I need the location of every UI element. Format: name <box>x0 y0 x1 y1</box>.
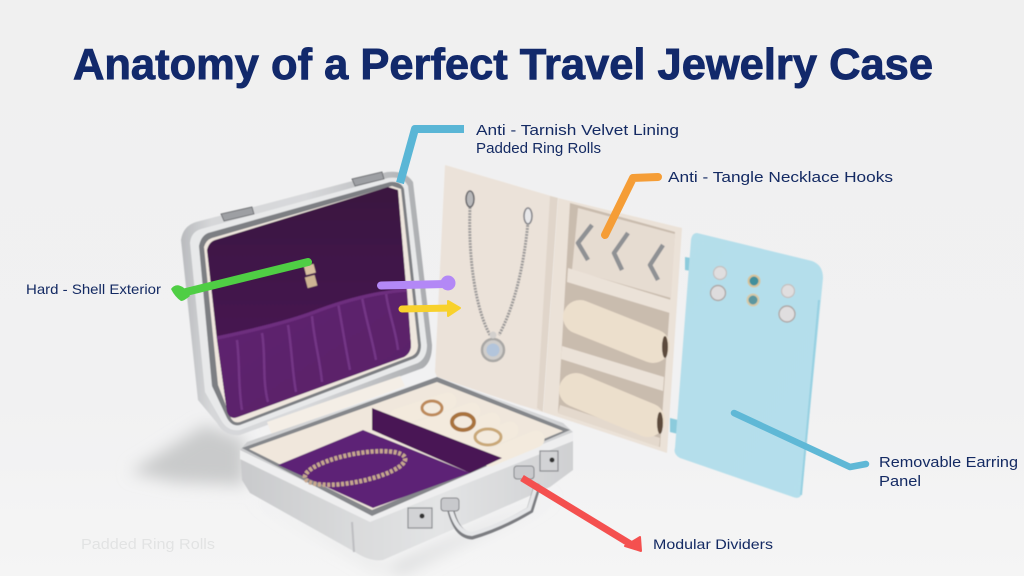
callout: velvet lining label <box>476 123 679 157</box>
callout: earring panel label: Removable Earring <box>879 455 1018 471</box>
shadow under case <box>130 425 555 575</box>
earring panel <box>670 233 823 498</box>
callout: earring panel label <box>879 455 1018 490</box>
callout: necklace hooks leader <box>605 177 658 235</box>
purple divider <box>372 408 502 473</box>
callout: hard-shell leader <box>171 262 308 301</box>
necklace <box>466 191 532 361</box>
back panel: necklace board <box>435 165 558 412</box>
callout: earring panel label: Panel <box>879 474 921 490</box>
purple velvet lining <box>207 187 411 418</box>
purple pointer <box>381 276 456 290</box>
hinge clasps <box>221 172 384 221</box>
purple tray <box>278 430 470 508</box>
back panel: hooks and ring rolls <box>543 198 682 453</box>
ring rolls <box>398 401 536 458</box>
callout: earring panel leader <box>734 413 866 467</box>
clasps and handle <box>408 451 558 536</box>
callout: modular dividers label: Modular Dividers <box>653 536 773 552</box>
callout: necklace hooks label: Anti - Tangle Necklace Hooks <box>668 170 893 186</box>
title: Anatomy of a Perfect Travel Jewelry Case <box>73 40 933 89</box>
charm <box>304 264 317 288</box>
callout: velvet lining label: Anti - Tarnish Velvet Lining <box>476 123 679 139</box>
callout: velvet lining leader <box>400 129 464 183</box>
lid hinge strip <box>267 376 405 435</box>
rings <box>422 401 501 445</box>
ring roll lower <box>576 390 663 434</box>
earrings <box>710 266 795 322</box>
ring roll upper <box>580 317 668 358</box>
callout: hard-shell label: Hard - Shell Exterior <box>26 281 161 297</box>
necklace hooks <box>578 225 663 280</box>
callout: modular dividers leader <box>522 478 641 551</box>
case base <box>240 377 573 560</box>
open case lid <box>181 172 432 435</box>
yellow pointer <box>402 301 460 316</box>
bracelet <box>302 445 408 491</box>
faint watermark label: Padded Ring Rolls <box>81 537 215 553</box>
callout: velvet lining label: Padded Ring Rolls <box>476 141 601 157</box>
